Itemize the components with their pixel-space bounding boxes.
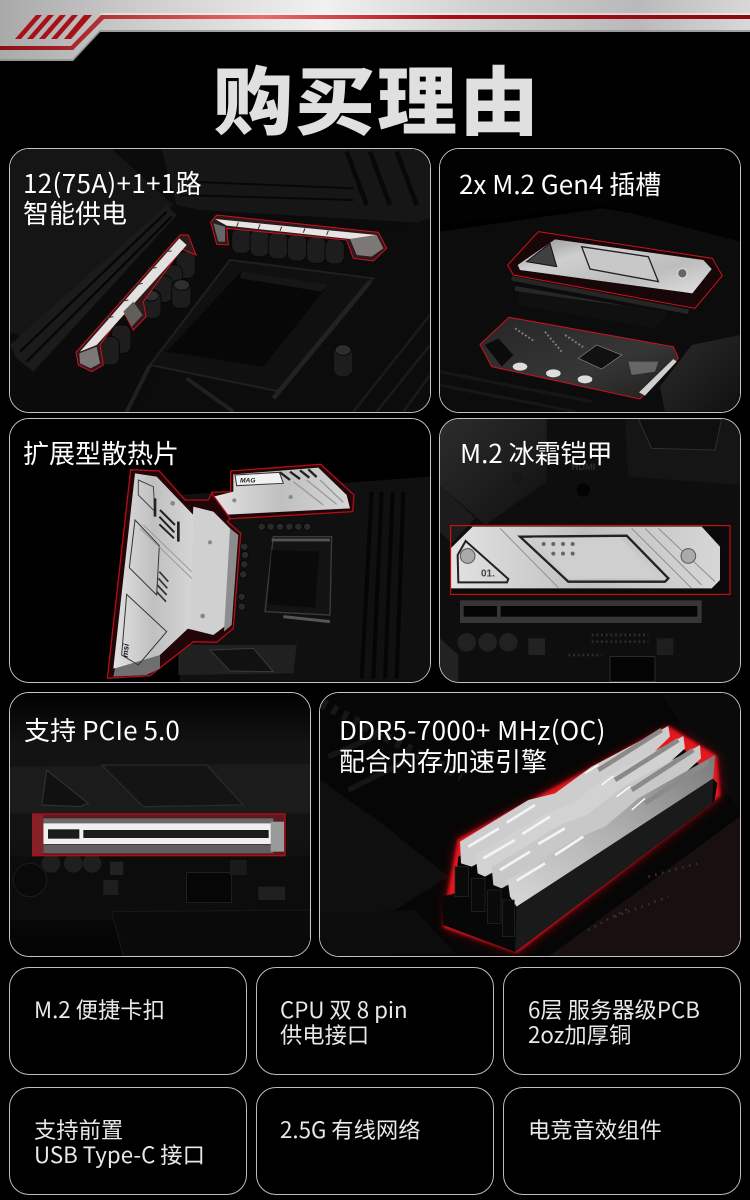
stick feet [455, 867, 514, 937]
panel: extended heatsink [9, 418, 431, 683]
M.2 shield dim [178, 645, 297, 675]
card: 2.5G network: 2.5G 有线网络 [280, 1113, 420, 1145]
heading: power delivery: 智能供电 [23, 194, 127, 231]
card: CPU power: CPU 双 8 pin [280, 993, 408, 1025]
card: M.2 clip: M.2 便捷卡扣 [34, 993, 165, 1025]
panel: DDR5 memory [319, 692, 741, 957]
capacitors [42, 854, 101, 873]
RAM sticks [460, 726, 715, 952]
card: CPU power: 供电接口 [280, 1018, 369, 1050]
card: 2.5G network [256, 1087, 494, 1195]
capacitors [100, 228, 353, 377]
dim board [440, 208, 740, 412]
top heatsink [162, 149, 430, 223]
PCIe slot [460, 600, 702, 623]
heading: extended heatsink: 扩展型散热片 [23, 434, 179, 471]
M.2 shield [451, 526, 730, 594]
pcb specks [588, 863, 698, 930]
heatsink: left, red outline [76, 235, 196, 372]
board lower right [140, 218, 430, 412]
top heatsink [212, 464, 354, 519]
heading: DDR5 memory [339, 711, 606, 779]
panel: M.2 frozen armor [439, 418, 741, 683]
board components [440, 633, 673, 682]
left VRM heatsink [10, 149, 177, 372]
black lower bodies [442, 747, 717, 952]
board [10, 857, 310, 956]
cpu socket [265, 537, 332, 622]
header band with red stripes [0, 0, 750, 61]
socket [625, 419, 740, 485]
grey heatsink bottom right [660, 335, 740, 412]
heading: M.2 frozen armor: M.2 冰霜铠甲 [460, 434, 613, 471]
main heatsink: msi [121, 643, 131, 658]
card: audio: 电竞音效组件 [528, 1113, 662, 1145]
card: USB Type-C [9, 1087, 247, 1195]
PCIe slot in red frame [33, 814, 285, 856]
card: USB Type-C: USB Type-C 接口 [34, 1138, 205, 1170]
card: PCB: 6层 服务器级PCB [528, 993, 700, 1025]
RAM slots [362, 492, 403, 678]
heading: power delivery: 12(75A)+1+1路 [23, 164, 202, 201]
card: audio [503, 1087, 741, 1195]
top-left heatsink [440, 419, 547, 525]
main heatsink [107, 470, 241, 678]
card: PCB [503, 967, 741, 1075]
heading: power delivery [23, 164, 202, 231]
hdmi label: HDMI [572, 462, 596, 472]
caps [238, 523, 311, 610]
red glow [445, 728, 720, 952]
panel: power delivery [9, 148, 431, 413]
heading: DDR5 memory: 配合内存加速引擎 [339, 742, 547, 779]
M.2 shield: 01. [481, 569, 495, 580]
dim board [320, 694, 740, 957]
M.2 shield [508, 232, 722, 308]
panel: PCIe 5.0 [9, 692, 311, 957]
panel: M.2 slots [439, 148, 741, 413]
card: CPU power [256, 967, 494, 1075]
heading: M.2 slots: 2x M.2 Gen4 插槽 [459, 165, 661, 202]
heading: DDR5 memory: DDR5-7000+ MHz(OC) [339, 711, 606, 748]
dim board [180, 477, 430, 682]
dim M.2 shield [10, 763, 310, 813]
top heatsink: MAG [240, 477, 256, 484]
card: M.2 clip [9, 967, 247, 1075]
heading: PCIe 5.0: 支持 PCIe 5.0 [24, 711, 180, 748]
title: 购买理由 [213, 43, 541, 151]
card: PCB: 2oz加厚铜 [528, 1018, 631, 1050]
card: USB Type-C: 支持前置 [34, 1113, 123, 1145]
heatsink: top, red outline [211, 215, 387, 261]
M.2 slot pcb [480, 317, 678, 399]
cpu socket [127, 260, 373, 412]
